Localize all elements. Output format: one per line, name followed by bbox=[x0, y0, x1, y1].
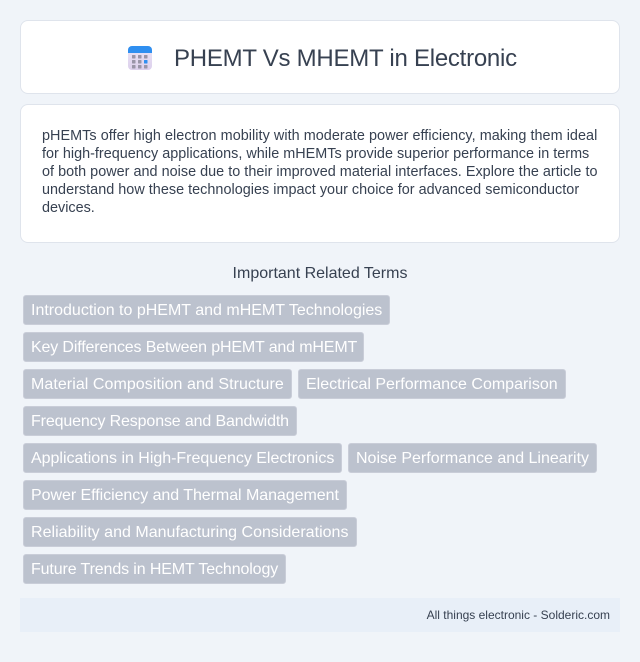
tag bbox=[298, 369, 566, 399]
tag bbox=[23, 406, 297, 436]
tag: Material Composition and Structure bbox=[31, 376, 284, 393]
intro paragraph: of both power and noise due to their improved material interfaces. Explore the article to bbox=[42, 164, 598, 180]
footer bar bbox=[20, 598, 620, 632]
header panel bbox=[20, 20, 620, 94]
tag: Applications in High-Frequency Electronics bbox=[31, 450, 334, 467]
title: PHEMT Vs MHEMT in Electronic bbox=[174, 45, 517, 72]
tag bbox=[348, 443, 597, 473]
tag: Reliability and Manufacturing Considerations bbox=[31, 524, 348, 541]
tag: Frequency Response and Bandwidth bbox=[31, 413, 289, 430]
tag: Noise Performance and Linearity bbox=[356, 450, 589, 467]
tag bbox=[23, 295, 390, 325]
icon: calendar bbox=[128, 46, 152, 70]
tag: Power Efficiency and Thermal Management bbox=[31, 487, 339, 504]
tag bbox=[23, 554, 286, 584]
intro paragraph: pHEMTs offer high electron mobility with moderate power efficiency, making them ideal bbox=[42, 128, 597, 144]
intro text panel bbox=[20, 104, 620, 243]
tag: Introduction to pHEMT and mHEMT Technologies bbox=[31, 302, 382, 319]
tag: Key Differences Between pHEMT and mHEMT bbox=[31, 339, 357, 356]
intro paragraph: for high-frequency applications, while mHEMTs provide superior performance in terms bbox=[42, 146, 589, 162]
intro paragraph: understand how these technologies impact your choice for advanced semiconductor bbox=[42, 182, 579, 198]
tag bbox=[23, 443, 342, 473]
footer text: All things electronic - Solderic.com bbox=[427, 608, 610, 622]
tag bbox=[23, 332, 364, 362]
tag bbox=[23, 517, 357, 547]
intro paragraph bbox=[42, 128, 598, 216]
tag bbox=[23, 480, 347, 510]
intro paragraph: devices. bbox=[42, 200, 95, 216]
tag: Electrical Performance Comparison bbox=[306, 376, 558, 393]
section heading: Important Related Terms bbox=[233, 265, 407, 282]
tags list bbox=[23, 295, 597, 584]
tag: Future Trends in HEMT Technology bbox=[31, 561, 278, 578]
tag bbox=[23, 369, 292, 399]
